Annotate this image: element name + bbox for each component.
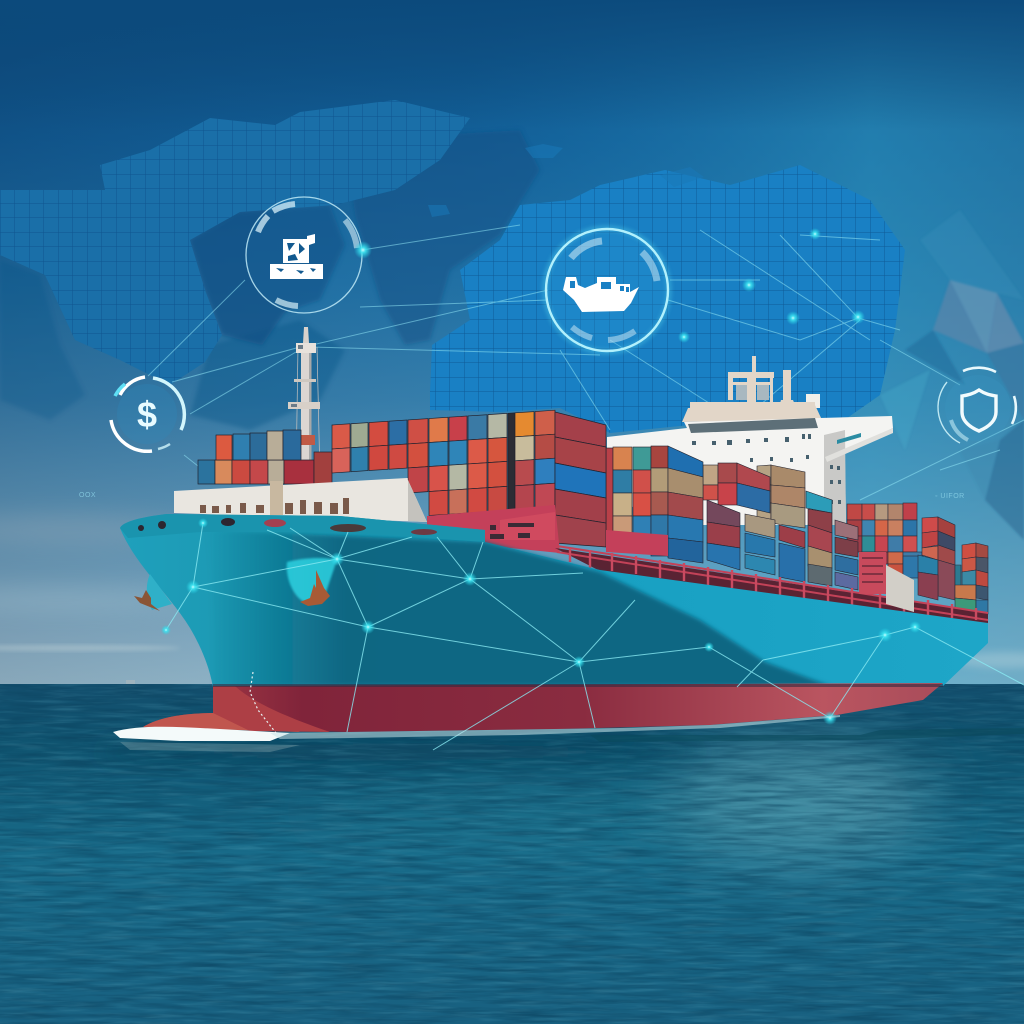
dollar sign: $	[137, 394, 157, 435]
bow bulge and port anchor	[147, 574, 172, 610]
stack F	[962, 543, 976, 559]
red boot topping	[143, 683, 943, 732]
forward container block	[198, 410, 606, 547]
ship mast	[288, 327, 320, 484]
hawse openings	[138, 518, 437, 535]
block side face	[555, 412, 606, 447]
stack A sides	[668, 446, 703, 477]
network lines in sky	[148, 225, 1024, 500]
bridge superstructure	[607, 356, 893, 525]
map: right continent grid	[428, 144, 905, 433]
bow wave foam	[113, 715, 1024, 752]
low-poly mesh at right	[880, 210, 1024, 540]
small caption right: ◦ UIFOR	[935, 493, 965, 500]
stack E	[922, 517, 938, 533]
wave highlights	[0, 684, 1024, 1024]
white tower and wing	[607, 416, 893, 525]
network nodes in sky	[678, 228, 865, 343]
upper hull band	[120, 514, 485, 542]
network lines on hull	[166, 523, 1024, 750]
sun reflection on water	[670, 740, 930, 860]
ship hull	[120, 514, 988, 733]
map: dark ocean and landmass patches	[0, 130, 540, 430]
stack A fronts	[606, 448, 613, 538]
second row	[332, 448, 350, 473]
darker mid hull	[205, 530, 830, 686]
anchor	[300, 570, 330, 606]
icon: dollar in ring	[111, 377, 184, 451]
low stack by mast	[198, 452, 332, 484]
hull shading clip group	[205, 530, 830, 686]
hull body	[120, 514, 988, 687]
third row	[408, 467, 428, 493]
stack D	[806, 491, 832, 513]
wave texture	[0, 684, 1024, 1024]
small caption left: OOX	[79, 492, 96, 499]
icon: oil rig in circle	[246, 197, 372, 313]
icon: ship in circle	[545, 228, 669, 352]
windows	[692, 434, 841, 504]
column by D	[835, 520, 858, 540]
distant boat	[126, 680, 135, 684]
lashing bridge and rail	[427, 505, 988, 624]
stack B	[703, 465, 718, 485]
lower columns	[707, 500, 740, 527]
ocean	[0, 680, 1024, 1024]
white forward deckhouse	[174, 478, 427, 522]
anchor pocket glow	[287, 558, 337, 604]
fourth row	[429, 490, 448, 516]
radar mast structures	[682, 356, 822, 422]
top row	[332, 424, 350, 449]
network nodes on hull	[161, 518, 921, 725]
world map grid	[0, 100, 905, 433]
bridge window band	[688, 418, 818, 433]
aft container stacks far right	[847, 503, 988, 614]
stack C	[757, 465, 771, 485]
mid container stacks	[606, 446, 858, 590]
sky background	[0, 0, 1024, 690]
map: left continent grid	[0, 100, 470, 385]
icon: shield in ring	[938, 368, 1016, 443]
